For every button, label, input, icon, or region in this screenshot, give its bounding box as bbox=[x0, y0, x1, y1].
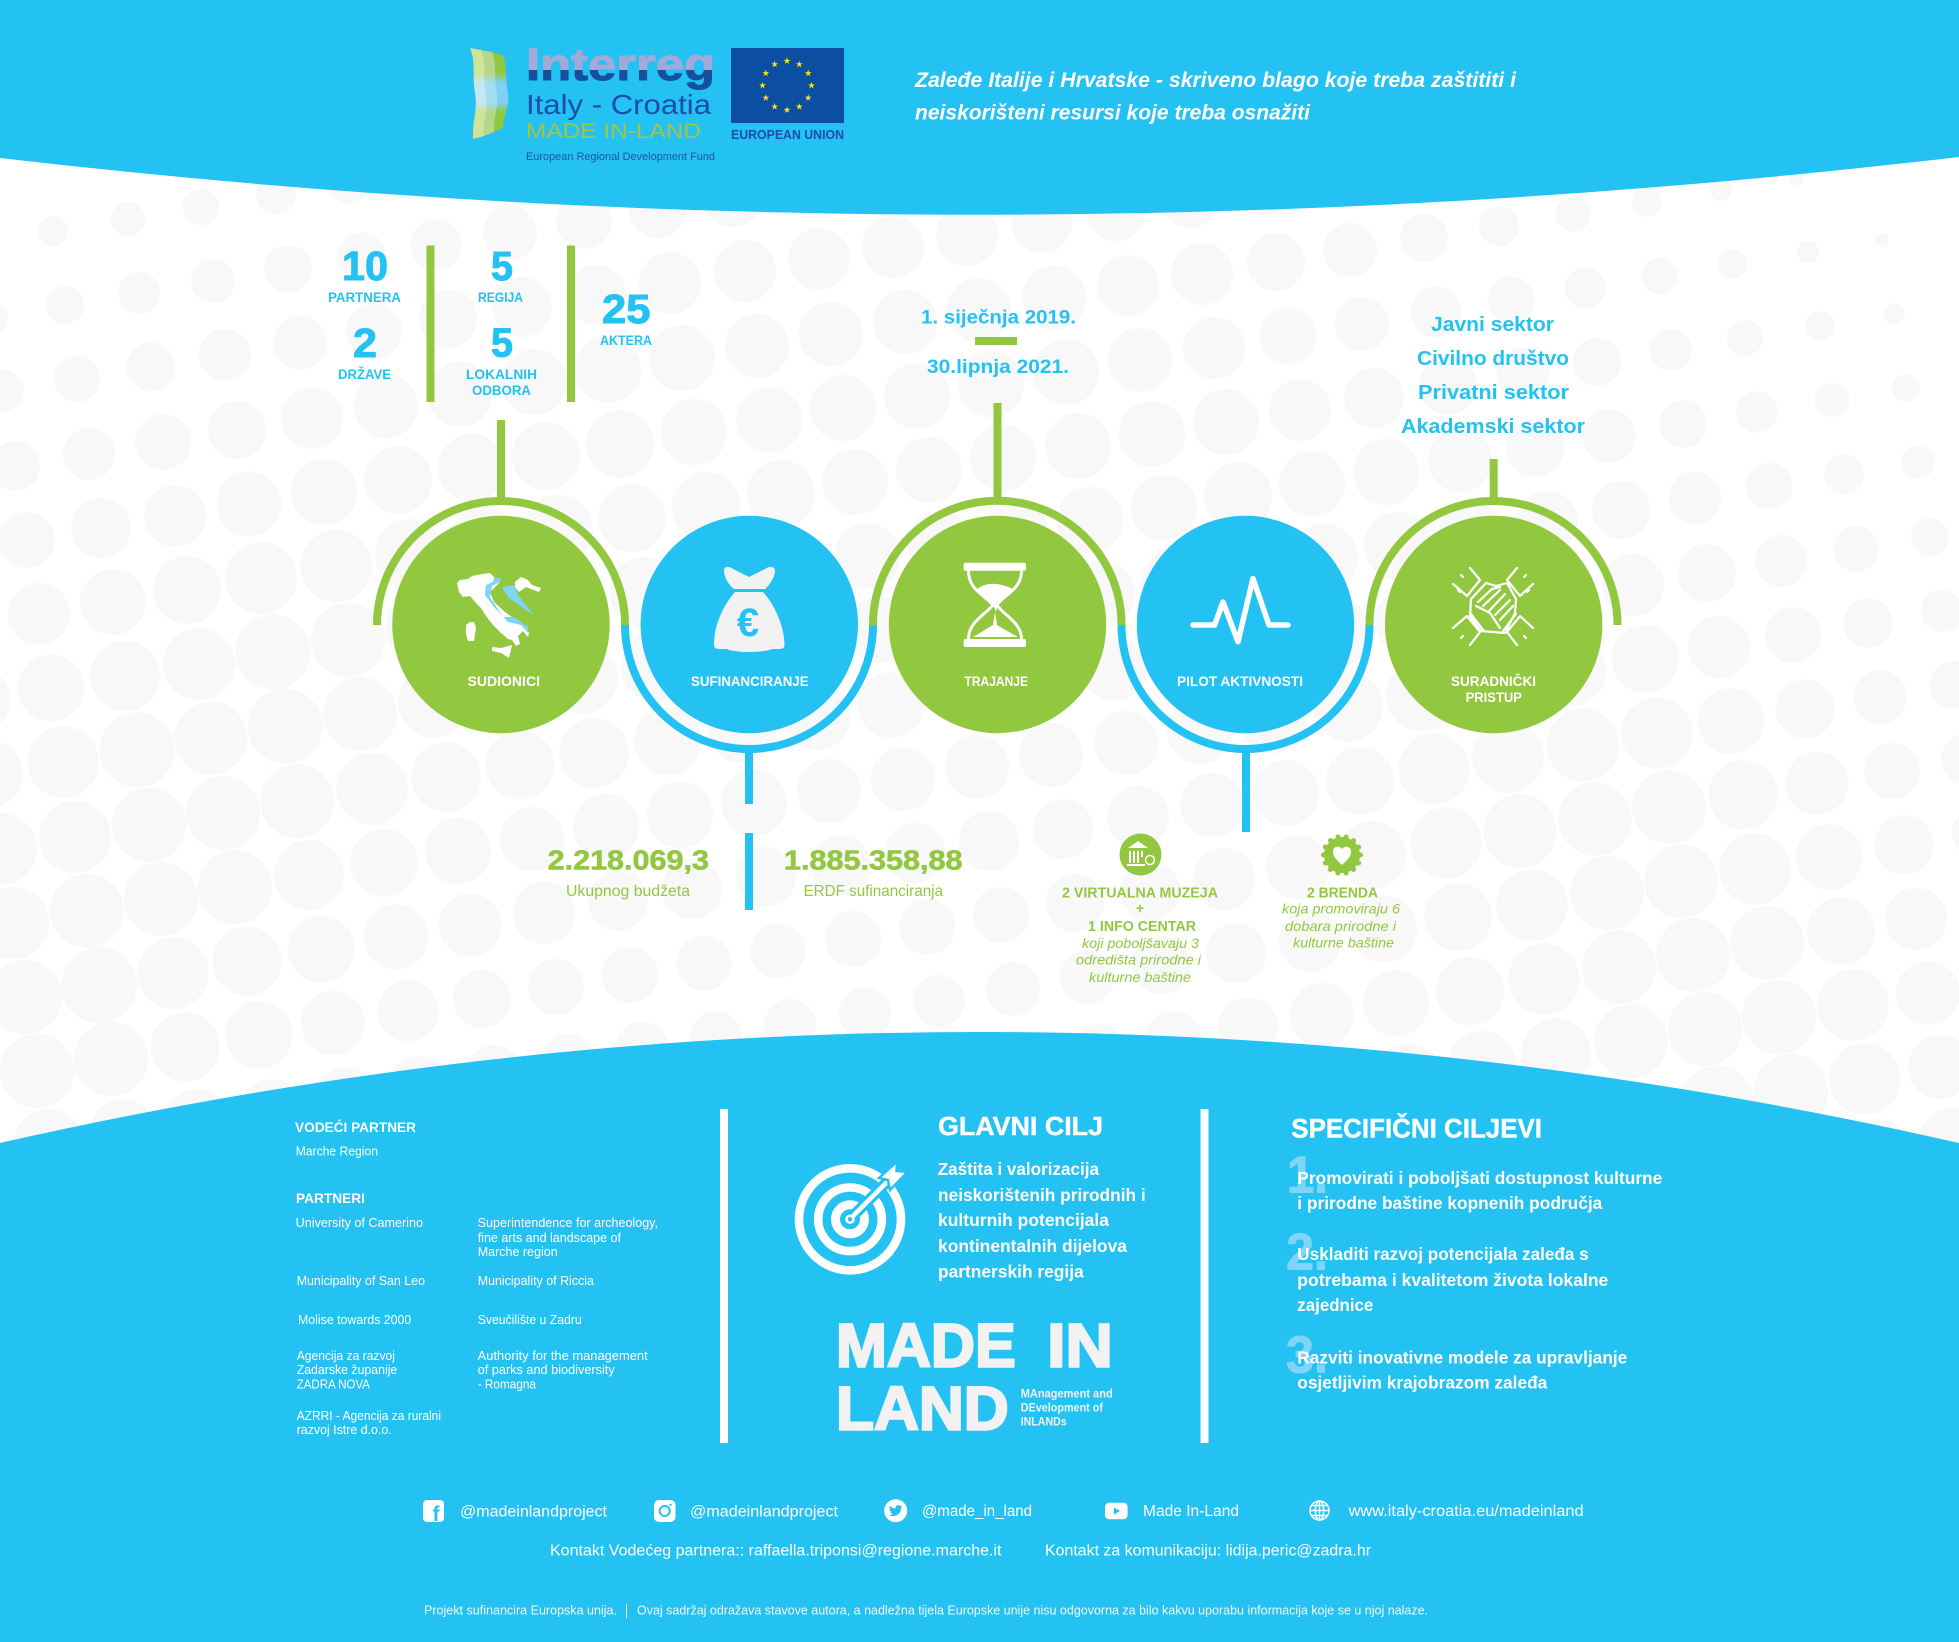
logo: Interreg Italy-Croatia MADE IN-LAND bbox=[470, 39, 715, 163]
label bbox=[1451, 674, 1536, 705]
node: Pilot aktivnosti bbox=[1137, 516, 1354, 733]
partner list: AZRRI - Agencija za ruralni bbox=[297, 1409, 441, 1423]
icon: museum bbox=[1120, 834, 1162, 876]
sectors list: Javni sektor bbox=[1431, 313, 1554, 336]
objective text: Zaštita i valorizacija bbox=[938, 1159, 1099, 1179]
stat: 5 lokalnih odbora bbox=[466, 320, 537, 398]
objective numerals: 1. bbox=[1287, 1147, 1328, 1205]
title tagline: neiskorišteni resursi koje treba osnažiti bbox=[915, 100, 1311, 124]
sectors list: Privatni sektor bbox=[1418, 381, 1569, 404]
objective 2: potrebama i kvalitetom života lokalne bbox=[1297, 1270, 1609, 1290]
objective numerals bbox=[1286, 1147, 1328, 1385]
label: SUFINANCIRANJE bbox=[691, 674, 809, 689]
partner list: Superintendence for archeology, bbox=[478, 1216, 658, 1230]
stat: ERDF co-financing bbox=[784, 844, 962, 900]
icon: globe bbox=[1310, 1501, 1329, 1520]
lead partner name: Marche Region bbox=[296, 1144, 378, 1158]
facebook handle: @madeinlandproject bbox=[460, 1504, 608, 1521]
acronym explanation: DEvelopment of bbox=[1021, 1403, 1103, 1415]
stat: total budget: Ukupnog budžeta bbox=[566, 883, 690, 900]
icon: facebook bbox=[423, 1500, 444, 1526]
project name: MADE IN LAND: LAND bbox=[836, 1375, 1009, 1443]
partner list: of parks and biodiversity bbox=[478, 1363, 615, 1377]
panel: specific objectives bbox=[1286, 1114, 1663, 1392]
label: TRAJANJE bbox=[964, 674, 1028, 689]
logo line: fund: European Regional Development Fund bbox=[526, 151, 715, 163]
stat: 5 lokalnih odbora: 5 bbox=[491, 320, 513, 366]
objective 2: Uskladiti razvoj potencijala zaleđa s bbox=[1297, 1244, 1589, 1264]
stat: 10 partnera: PARTNERA bbox=[328, 290, 401, 305]
heading: main objective: GLAVNI CILJ bbox=[938, 1111, 1103, 1141]
duration dates: 1. siječnja 2019. bbox=[921, 308, 1076, 328]
label: PRISTUP bbox=[1466, 690, 1522, 705]
objective 3 bbox=[1297, 1347, 1628, 1392]
twitter handle: @made_in_land bbox=[922, 1503, 1032, 1520]
output: virtual museums and info centre: koji poboljšavaju 3 bbox=[1082, 935, 1199, 951]
objective 3: osjetljivim krajobrazom zaleđa bbox=[1297, 1372, 1548, 1392]
partner list: Zadarske županije bbox=[297, 1363, 397, 1377]
icon: youtube bbox=[1105, 1503, 1128, 1519]
label: PILOT AKTIVNOSTI bbox=[1177, 674, 1303, 689]
partner list bbox=[296, 1216, 658, 1437]
objective 1: Promovirati i poboljšati dostupnost kulturne bbox=[1297, 1168, 1663, 1188]
contacts: Kontakt za komunikaciju: lidija.peric@zadra.hr bbox=[1045, 1542, 1371, 1559]
logo: European Union flag bbox=[731, 48, 844, 142]
objective text: partnerskih regija bbox=[938, 1262, 1084, 1282]
output: virtual museums and info centre: 1 INFO CENTAR bbox=[1088, 919, 1197, 935]
icon: joined hands bbox=[1453, 568, 1533, 645]
icon: target with arrow bbox=[799, 1162, 908, 1270]
icon: twitter bbox=[884, 1499, 907, 1522]
stat: 25 aktera: AKTERA bbox=[600, 333, 652, 348]
objective 3: Razviti inovativne modele za upravljanje bbox=[1297, 1347, 1628, 1367]
partner list: ZADRA NOVA bbox=[297, 1378, 371, 1392]
output: virtual museums and info centre: odredišta prirodne i bbox=[1076, 952, 1202, 968]
partner list: Agencija za razvoj bbox=[297, 1349, 395, 1363]
heading: specific objectives: SPECIFIČNI CILJEVI bbox=[1291, 1114, 1542, 1144]
disclaimer: Projekt sufinancira Europska unija. bbox=[424, 1603, 617, 1617]
output: brands: 2 BRENDA bbox=[1307, 886, 1379, 902]
contacts: Kontakt Vodećeg partnera:: raffaella.triponsi@regione.marche.it bbox=[550, 1542, 1002, 1559]
output: virtual museums and info centre: kulturne baštine bbox=[1089, 969, 1191, 985]
contacts bbox=[550, 1542, 1371, 1559]
icon: Interreg waves bbox=[470, 48, 508, 139]
acronym explanation: MAnagement and bbox=[1021, 1388, 1113, 1400]
title tagline: Zaleđe Italije i Hrvatske - skriveno blago koje treba zaštititi i bbox=[914, 68, 1517, 92]
partner list: Sveučilište u Zadru bbox=[478, 1313, 582, 1327]
stat: 2 države bbox=[338, 320, 391, 382]
partner list: University of Camerino bbox=[296, 1216, 423, 1230]
flag caption: EUROPEAN UNION bbox=[731, 128, 844, 142]
icon: hourglass bbox=[964, 563, 1026, 647]
stat: 5 lokalnih odbora: LOKALNIH bbox=[466, 367, 537, 382]
node: Sufinanciranje bbox=[641, 516, 858, 733]
stat: total budget bbox=[548, 844, 709, 900]
partner list: Marche region bbox=[478, 1245, 558, 1259]
heading: partners: PARTNERI bbox=[296, 1190, 365, 1206]
objective text: kulturnih potencijala bbox=[938, 1210, 1109, 1230]
node: Sudionici bbox=[392, 516, 610, 733]
stats: participants figures bbox=[328, 243, 652, 398]
icon: money bag with euro: € bbox=[737, 601, 759, 645]
icon: heart seal bbox=[1324, 836, 1360, 874]
website: www.italy-croatia.eu/madeinland bbox=[1348, 1503, 1584, 1520]
objective numerals: 3. bbox=[1286, 1327, 1328, 1385]
project name: MADE IN LAND bbox=[836, 1311, 1113, 1443]
objective 1 bbox=[1297, 1168, 1663, 1213]
icon: map of Italy and Croatia bbox=[457, 573, 541, 658]
stat: 10 partnera: 10 bbox=[342, 243, 388, 289]
sectors list bbox=[1401, 313, 1585, 438]
duration dates bbox=[921, 308, 1076, 378]
stat: 5 regija: 5 bbox=[491, 243, 513, 289]
partner list: fine arts and landscape of bbox=[478, 1231, 622, 1245]
acronym explanation: INLANDs bbox=[1021, 1417, 1067, 1429]
partner list: Municipality of Riccia bbox=[478, 1274, 594, 1288]
partner list: Molise towards 2000 bbox=[298, 1313, 411, 1327]
stat: 25 aktera bbox=[600, 286, 652, 348]
logo word: Interreg: Interreg bbox=[526, 39, 715, 90]
disclaimer: Ovaj sadržaj odražava stavove autora, a nadležna tijela Europske unije nisu odgovorna za bilo kakvu uporabu informacija koje se u njoj nalaze. bbox=[637, 1603, 1428, 1617]
label: SURADNIČKI bbox=[1451, 674, 1536, 689]
panel: partners bbox=[295, 1118, 658, 1437]
header band bbox=[0, 0, 1959, 215]
objective 2: zajednice bbox=[1297, 1295, 1374, 1315]
output: brands: koja promoviraju 6 bbox=[1282, 900, 1400, 916]
heading: lead partner: VODEĆI PARTNER bbox=[295, 1118, 416, 1135]
output: brands: kulturne baštine bbox=[1293, 934, 1394, 950]
objective text: neiskorištenih prirodnih i bbox=[938, 1185, 1146, 1205]
stat: 10 partnera bbox=[328, 243, 401, 305]
title tagline bbox=[914, 68, 1517, 124]
objective 2 bbox=[1297, 1244, 1609, 1315]
partner list: - Romagna bbox=[478, 1378, 536, 1392]
stat: ERDF co-financing: 1.885.358,88 bbox=[784, 844, 962, 876]
stat: ERDF co-financing: ERDF sufinanciranja bbox=[804, 883, 943, 900]
node: Suradnički pristup bbox=[1385, 516, 1602, 733]
logo line: Italy - Croatia: Italy - Croatia bbox=[526, 89, 711, 120]
timeline connectors bbox=[377, 403, 1618, 910]
icon: instagram bbox=[654, 1500, 676, 1522]
stat: 5 regija: REGIJA bbox=[478, 290, 523, 305]
label: SUDIONICI bbox=[468, 674, 540, 689]
logo line: MADE IN-LAND: MADE IN-LAND bbox=[526, 120, 701, 143]
objective 1: i prirodne baštine kopnenih područja bbox=[1297, 1193, 1603, 1213]
partner list: razvoj Istre d.o.o. bbox=[297, 1423, 392, 1437]
sectors list: Civilno društvo bbox=[1417, 347, 1569, 370]
partner list: Municipality of San Leo bbox=[297, 1274, 425, 1288]
objective numerals: 2. bbox=[1286, 1223, 1328, 1281]
instagram handle: @madeinlandproject bbox=[690, 1504, 839, 1521]
icon: money bag with euro bbox=[714, 567, 784, 652]
project name: MADE IN LAND: IN bbox=[1047, 1311, 1113, 1379]
output: brands bbox=[1282, 836, 1400, 950]
sectors list: Akademski sektor bbox=[1401, 415, 1585, 438]
stat: 5 regija bbox=[478, 243, 523, 305]
objective text: kontinentalnih dijelova bbox=[938, 1236, 1127, 1256]
objective text bbox=[938, 1159, 1146, 1282]
duration dates: 30.lipnja 2021. bbox=[927, 357, 1069, 378]
youtube name: Made In-Land bbox=[1143, 1503, 1239, 1520]
project name: MADE IN LAND: MADE bbox=[836, 1311, 1016, 1379]
social links bbox=[423, 1499, 1584, 1526]
icon: facebook: f bbox=[432, 1503, 440, 1526]
panel: main objective bbox=[799, 1111, 1146, 1282]
partner list: Authority for the management bbox=[478, 1349, 648, 1363]
stat: 25 aktera: 25 bbox=[602, 286, 650, 332]
output: virtual museums and info centre: 2 VIRTUALNA MUZEJA bbox=[1062, 886, 1219, 902]
stat: 2 države: 2 bbox=[353, 320, 377, 366]
stat: 2 države: DRŽAVE bbox=[338, 367, 391, 382]
icon: pulse line bbox=[1193, 578, 1288, 642]
footer band bbox=[0, 1032, 1959, 1642]
node: Trajanje bbox=[889, 516, 1106, 733]
acronym explanation bbox=[1021, 1388, 1113, 1429]
output: virtual museums and info centre: + bbox=[1136, 900, 1144, 916]
stat: 5 lokalnih odbora: ODBORA bbox=[472, 383, 531, 398]
stat: total budget: 2.218.069,3 bbox=[548, 844, 709, 876]
output: virtual museums and info centre bbox=[1062, 834, 1219, 985]
output: brands: dobara prirodne i bbox=[1285, 918, 1397, 934]
